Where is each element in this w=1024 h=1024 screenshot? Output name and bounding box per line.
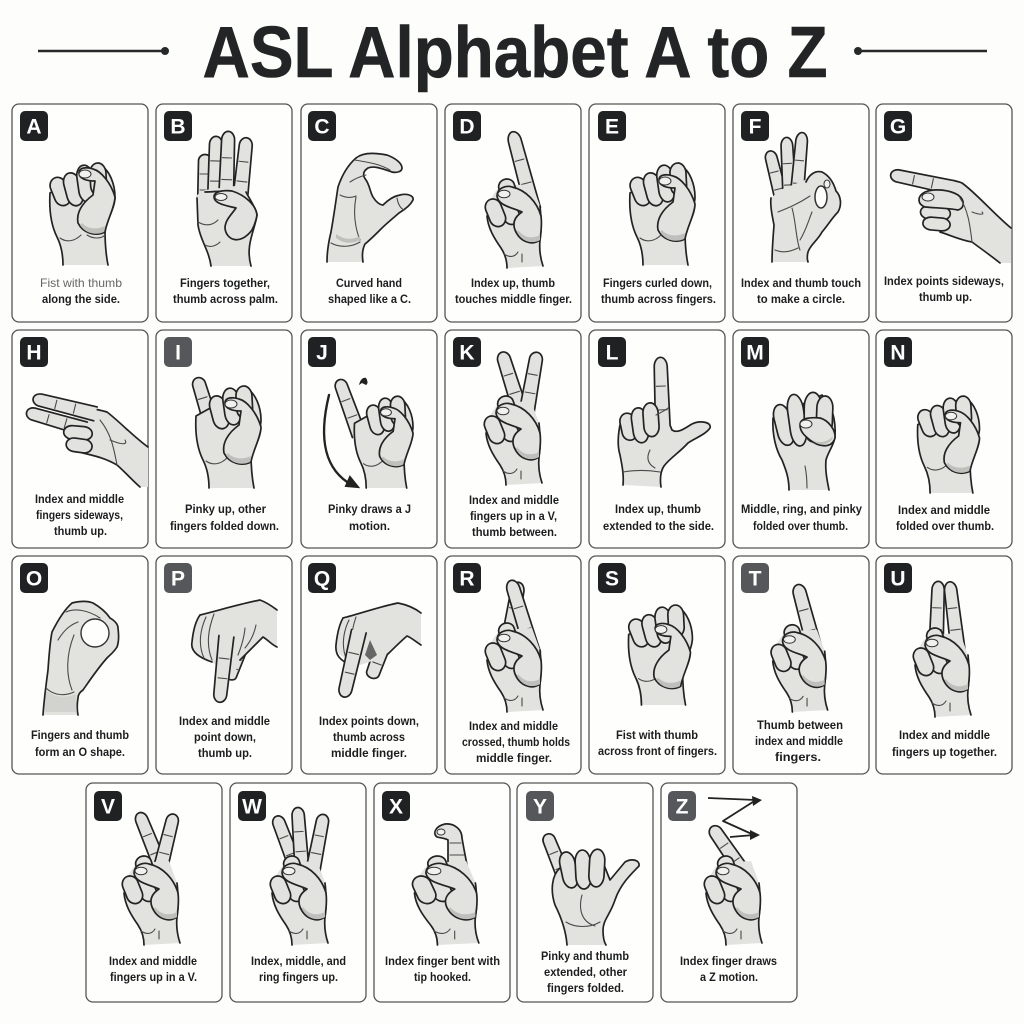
card frame I	[156, 330, 292, 548]
caption Y: fingers folded.	[547, 981, 624, 995]
caption T: Thumb between	[757, 718, 843, 732]
badge H	[20, 337, 48, 367]
caption E: thumb across fingers.	[601, 292, 716, 306]
caption R: crossed, thumb holds	[462, 735, 570, 749]
caption B	[173, 276, 278, 306]
badge R	[453, 563, 481, 593]
caption Z	[680, 954, 777, 984]
badge O: O	[26, 568, 42, 590]
card frame M	[733, 330, 869, 548]
hand D	[483, 130, 543, 268]
card frame B	[156, 104, 292, 322]
hand X	[409, 824, 479, 945]
arrow: J motion	[324, 378, 368, 487]
caption O	[31, 728, 129, 759]
card: H	[12, 330, 148, 548]
card: G	[876, 104, 1012, 322]
badge Y: Y	[533, 796, 547, 818]
caption H	[35, 492, 124, 538]
card frame K	[445, 330, 581, 548]
caption Z: Index finger draws	[680, 954, 777, 968]
badge O	[20, 563, 48, 593]
card: R	[445, 556, 581, 774]
caption K: thumb between.	[472, 525, 557, 539]
caption O: form an O shape.	[35, 745, 125, 759]
caption T: fingers.	[775, 750, 821, 764]
card: K	[445, 330, 581, 548]
card frame S	[589, 556, 725, 774]
hand E	[627, 163, 695, 265]
badge W: W	[242, 796, 262, 818]
caption V	[109, 954, 197, 984]
caption G: Index points sideways,	[884, 274, 1004, 288]
hand H	[25, 391, 148, 487]
badge L: L	[606, 342, 619, 364]
card: W	[230, 783, 366, 1002]
card frame F	[733, 104, 869, 322]
caption V: fingers up in a V.	[110, 970, 197, 984]
card frame G	[876, 104, 1012, 322]
card frame J	[301, 330, 437, 548]
caption R	[462, 719, 570, 765]
caption L: extended to the side.	[603, 519, 714, 533]
caption W: Index, middle, and	[251, 954, 346, 968]
card: L	[589, 330, 725, 548]
badge E	[598, 111, 626, 141]
hand S	[626, 605, 692, 705]
hand R	[483, 578, 543, 712]
badge B: B	[170, 116, 186, 138]
caption Y	[541, 949, 629, 995]
card frame U	[876, 556, 1012, 774]
caption Z: a Z motion.	[700, 970, 758, 984]
title rule left	[38, 47, 169, 55]
caption P	[179, 714, 270, 760]
caption T: index and middle	[755, 734, 843, 748]
caption N: Index and middle	[898, 503, 990, 517]
card: C	[301, 104, 437, 322]
card: A	[12, 104, 148, 322]
caption K: fingers up in a V,	[470, 509, 557, 523]
caption P: Index and middle	[179, 714, 270, 728]
card: V	[86, 783, 222, 1002]
hand O	[43, 602, 119, 715]
hand G	[889, 167, 1011, 263]
caption V: Index and middle	[109, 954, 197, 968]
badge S: S	[605, 568, 619, 590]
caption I: fingers folded down.	[170, 519, 279, 533]
caption X: Index finger bent with	[385, 954, 500, 968]
badge A: A	[26, 116, 42, 138]
badge N: N	[890, 342, 906, 364]
caption F: Index and thumb touch	[741, 276, 861, 290]
badge V	[94, 791, 122, 821]
badge G: G	[890, 116, 906, 138]
caption R: Index and middle	[469, 719, 558, 733]
badge Z: Z	[676, 796, 689, 818]
caption U: Index and middle	[899, 728, 990, 742]
caption W	[251, 954, 346, 984]
caption X	[385, 954, 500, 984]
caption B: thumb across palm.	[173, 292, 278, 306]
badge J	[308, 337, 336, 367]
badge K	[453, 337, 481, 367]
card: N	[876, 330, 1012, 548]
caption A	[40, 276, 122, 306]
caption H: Index and middle	[35, 492, 124, 506]
hand F	[763, 132, 840, 262]
badge Y	[526, 791, 554, 821]
caption O: Fingers and thumb	[31, 728, 129, 742]
caption A: Fist with thumb	[40, 276, 122, 290]
caption Q: Index points down,	[319, 714, 419, 728]
caption P: thumb up.	[198, 746, 252, 760]
caption M: folded over thumb.	[753, 519, 848, 533]
badge L	[598, 337, 626, 367]
hand N	[915, 396, 980, 493]
caption J: motion.	[349, 519, 390, 533]
hand K	[482, 350, 545, 485]
caption Q: thumb across	[333, 730, 405, 744]
caption R: middle finger.	[476, 751, 552, 765]
caption I: Pinky up, other	[185, 502, 266, 516]
card: B	[156, 104, 292, 322]
hand M	[771, 392, 835, 490]
badge S	[598, 563, 626, 593]
card: X	[374, 783, 510, 1002]
card: E	[589, 104, 725, 322]
card frame P	[156, 556, 292, 774]
caption H: fingers sideways,	[36, 508, 123, 522]
caption N	[896, 503, 994, 533]
badge Z	[668, 791, 696, 821]
badge D: D	[459, 116, 475, 138]
card frame L	[589, 330, 725, 548]
hand J	[332, 377, 413, 488]
hand C	[327, 153, 413, 262]
caption S: Fist with thumb	[616, 728, 698, 742]
card frame V	[86, 783, 222, 1002]
hand Z	[702, 822, 762, 945]
card frame O	[12, 556, 148, 774]
caption M: Middle, ring, and pinky	[741, 502, 862, 516]
badge T	[741, 563, 769, 593]
hand W	[268, 807, 331, 945]
badge X	[382, 791, 410, 821]
hand B	[197, 131, 257, 266]
badge Q: Q	[314, 568, 330, 590]
card frame C	[301, 104, 437, 322]
caption G: thumb up.	[919, 290, 972, 304]
badge M	[741, 337, 769, 367]
badge C: C	[314, 116, 330, 138]
caption C: Curved hand	[336, 276, 402, 290]
card frame X	[374, 783, 510, 1002]
caption E: Fingers curled down,	[603, 276, 712, 290]
hand T	[769, 583, 828, 712]
badge J: J	[316, 342, 328, 364]
badge W	[238, 791, 266, 821]
badge B	[164, 111, 192, 141]
caption K	[469, 493, 559, 539]
caption Y: extended, other	[544, 965, 627, 979]
badge G	[884, 111, 912, 141]
badge D	[453, 111, 481, 141]
badge C	[308, 111, 336, 141]
card: T	[733, 556, 869, 774]
caption L: Index up, thumb	[615, 502, 701, 516]
badge X: X	[389, 796, 403, 818]
card frame W	[230, 783, 366, 1002]
card frame Q	[301, 556, 437, 774]
caption U: fingers up together.	[892, 745, 997, 759]
caption U	[892, 728, 997, 759]
badge M: M	[746, 342, 764, 364]
badge F: F	[749, 116, 762, 138]
caption F: to make a circle.	[757, 292, 845, 306]
caption B: Fingers together,	[180, 276, 270, 290]
badge K: K	[459, 342, 475, 364]
caption J: Pinky draws a J	[328, 502, 411, 516]
card: O	[12, 556, 148, 774]
caption C	[328, 276, 411, 306]
card frame R	[445, 556, 581, 774]
badge F	[741, 111, 769, 141]
badge I	[164, 337, 192, 367]
card frame A	[12, 104, 148, 322]
card frame T	[733, 556, 869, 774]
hand P	[192, 600, 277, 703]
card: P	[156, 556, 292, 774]
card frame D	[445, 104, 581, 322]
caption S: across front of fingers.	[598, 744, 717, 758]
card frame E	[589, 104, 725, 322]
badge N	[884, 337, 912, 367]
caption D	[455, 276, 572, 306]
caption Y: Pinky and thumb	[541, 949, 629, 963]
card frame H	[12, 330, 148, 548]
caption H: thumb up.	[54, 524, 107, 538]
badge P: P	[171, 568, 185, 590]
card frame Y	[517, 783, 653, 1002]
hand U	[911, 581, 971, 717]
badge A	[20, 111, 48, 141]
badge P	[164, 563, 192, 593]
card: D	[445, 104, 581, 322]
card: Y	[517, 783, 653, 1002]
badge U: U	[890, 568, 906, 590]
caption N: folded over thumb.	[896, 519, 994, 533]
card: M	[733, 330, 869, 548]
card: U	[876, 556, 1012, 774]
arrow: Z motion	[708, 796, 762, 840]
hand A	[47, 163, 115, 265]
caption L	[603, 502, 714, 533]
card: J	[301, 330, 437, 548]
hand L	[618, 357, 710, 487]
hand Q	[336, 603, 421, 699]
caption A: along the side.	[42, 292, 120, 306]
caption D: Index up, thumb	[471, 276, 555, 290]
card frame N	[876, 330, 1012, 548]
caption D: touches middle finger.	[455, 292, 572, 306]
title rule right	[854, 47, 987, 55]
caption I	[170, 502, 279, 533]
badge Q	[308, 563, 336, 593]
badge T: T	[749, 568, 762, 590]
caption G	[884, 274, 1004, 304]
caption M	[741, 502, 862, 533]
caption Q: middle finger.	[331, 746, 407, 760]
card: Q	[301, 556, 437, 774]
caption J	[328, 502, 411, 533]
hand Y	[540, 832, 639, 945]
caption F	[741, 276, 861, 306]
caption P: point down,	[194, 730, 256, 744]
caption C: shaped like a C.	[328, 292, 411, 306]
hand I	[190, 376, 261, 488]
badge E: E	[605, 116, 619, 138]
title: ASL Alphabet A to Z	[202, 13, 828, 93]
badge R: R	[459, 568, 475, 590]
caption Q	[319, 714, 419, 760]
caption W: ring fingers up.	[259, 970, 338, 984]
caption E	[601, 276, 716, 306]
card: Z	[661, 783, 797, 1002]
card: I	[156, 330, 292, 548]
caption X: tip hooked.	[414, 970, 471, 984]
hand V	[120, 810, 181, 945]
badge H: H	[26, 342, 42, 364]
card: F	[733, 104, 869, 322]
caption K: Index and middle	[469, 493, 559, 507]
card frame Z	[661, 783, 797, 1002]
caption S	[598, 728, 717, 758]
card: S	[589, 556, 725, 774]
caption T	[755, 718, 843, 764]
badge V: V	[101, 796, 115, 818]
badge I: I	[175, 342, 181, 364]
badge U	[884, 563, 912, 593]
